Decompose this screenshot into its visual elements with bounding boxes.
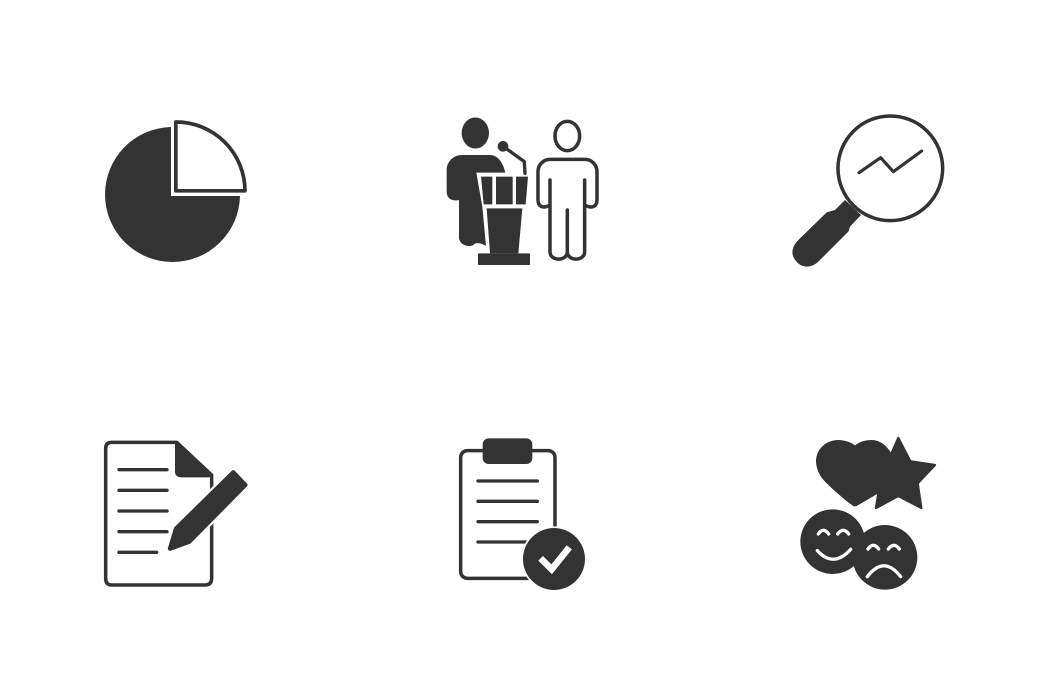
icon: pie chart: [105, 122, 245, 262]
icon: clipboard with check mark: [461, 438, 585, 590]
icon: document with pencil: [106, 442, 245, 585]
icon: magnifying glass with trend line: [792, 116, 943, 267]
icon: heart, star and emotion faces: [800, 438, 935, 590]
icon: speaker at podium with listener: [447, 117, 597, 265]
